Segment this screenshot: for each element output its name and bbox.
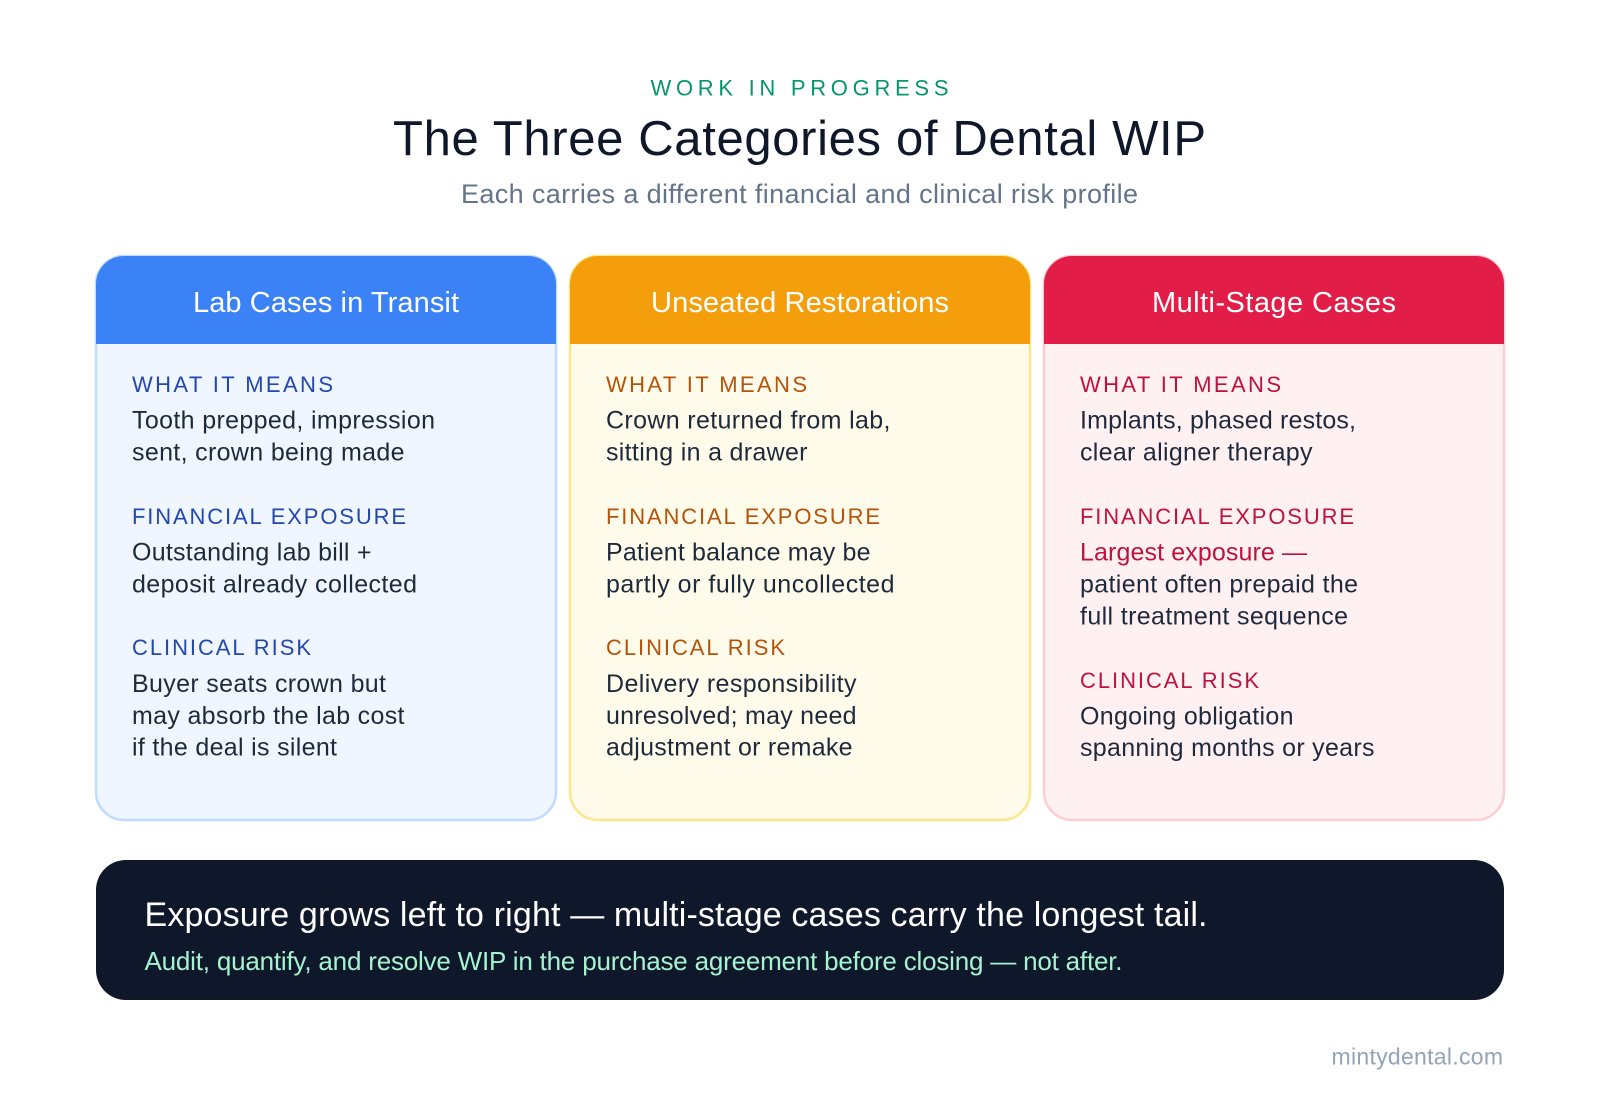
panel background — [1044, 256, 1504, 820]
description: Outstanding lab bill + — [132, 538, 372, 566]
description — [1080, 702, 1374, 762]
description: spanning months or years — [1080, 734, 1374, 762]
panel heading: Multi-Stage Cases — [1152, 287, 1396, 319]
description: full treatment sequence — [1080, 602, 1348, 630]
description: deposit already collected — [132, 570, 417, 598]
panel header bar — [1044, 256, 1504, 344]
panel: Lab Cases in Transit — [96, 256, 556, 820]
description — [1080, 406, 1356, 466]
description: sent, crown being made — [132, 438, 404, 466]
description — [606, 406, 890, 466]
label: FINANCIAL EXPOSURE — [606, 504, 880, 529]
description: clear aligner therapy — [1080, 438, 1313, 466]
banner subline: Audit, quantify, and resolve WIP in the purchase agreement before closing — not after. — [144, 946, 1122, 976]
section: clinical risk — [132, 635, 405, 762]
section: clinical risk — [606, 635, 857, 762]
description: may absorb the lab cost — [132, 702, 405, 730]
header block — [393, 76, 1206, 209]
section: what it means — [606, 372, 890, 466]
footer credit: mintydental.com — [1332, 1044, 1503, 1070]
label: CLINICAL RISK — [132, 635, 311, 660]
panel: Multi-Stage Cases — [1044, 256, 1504, 820]
subtitle: Each carries a different financial and clinical risk profile — [461, 179, 1138, 209]
label: WHAT IT MEANS — [606, 372, 807, 397]
label: WHAT IT MEANS — [132, 372, 333, 397]
panel heading: Unseated Restorations — [651, 287, 949, 319]
section: clinical risk — [1080, 668, 1374, 762]
description: adjustment or remake — [606, 734, 852, 762]
eyebrow: WORK IN PROGRESS — [650, 76, 948, 100]
section: what it means — [1080, 372, 1356, 466]
banner headline: Exposure grows left to right — multi-stage cases carry the longest tail. — [144, 896, 1208, 934]
panel header bar — [570, 256, 1030, 344]
label: FINANCIAL EXPOSURE — [1080, 504, 1354, 529]
banner background — [96, 860, 1504, 1000]
description: Crown returned from lab, — [606, 406, 890, 434]
description: Tooth prepped, impression — [132, 406, 435, 434]
callout banner — [96, 860, 1504, 1000]
description: Buyer seats crown but — [132, 670, 386, 698]
description — [132, 670, 405, 762]
label: WHAT IT MEANS — [1080, 372, 1281, 397]
description — [132, 538, 417, 598]
description — [606, 538, 894, 598]
label: FINANCIAL EXPOSURE — [132, 504, 406, 529]
panel: Unseated Restorations — [570, 256, 1030, 820]
label: CLINICAL RISK — [1080, 668, 1259, 693]
section: financial exposure — [606, 504, 894, 598]
section: what it means — [132, 372, 435, 466]
description: patient often prepaid the — [1080, 570, 1358, 598]
description — [132, 406, 435, 466]
label: CLINICAL RISK — [606, 635, 785, 660]
description: if the deal is silent — [132, 734, 337, 762]
description: Largest exposure — — [1080, 538, 1307, 566]
description — [606, 670, 857, 762]
panel background — [570, 256, 1030, 820]
section: financial exposure — [1080, 504, 1358, 630]
description: Patient balance may be — [606, 538, 870, 566]
description: Implants, phased restos, — [1080, 406, 1356, 434]
panel header bar — [96, 256, 556, 344]
description: unresolved; may need — [606, 702, 856, 730]
description: partly or fully uncollected — [606, 570, 894, 598]
description: Delivery responsibility — [606, 670, 857, 698]
panel heading: Lab Cases in Transit — [193, 287, 459, 319]
description — [1080, 538, 1358, 630]
panel background — [96, 256, 556, 820]
description: sitting in a drawer — [606, 438, 808, 466]
section: financial exposure — [132, 504, 417, 598]
description: Ongoing obligation — [1080, 702, 1294, 730]
title: The Three Categories of Dental WIP — [393, 112, 1206, 166]
